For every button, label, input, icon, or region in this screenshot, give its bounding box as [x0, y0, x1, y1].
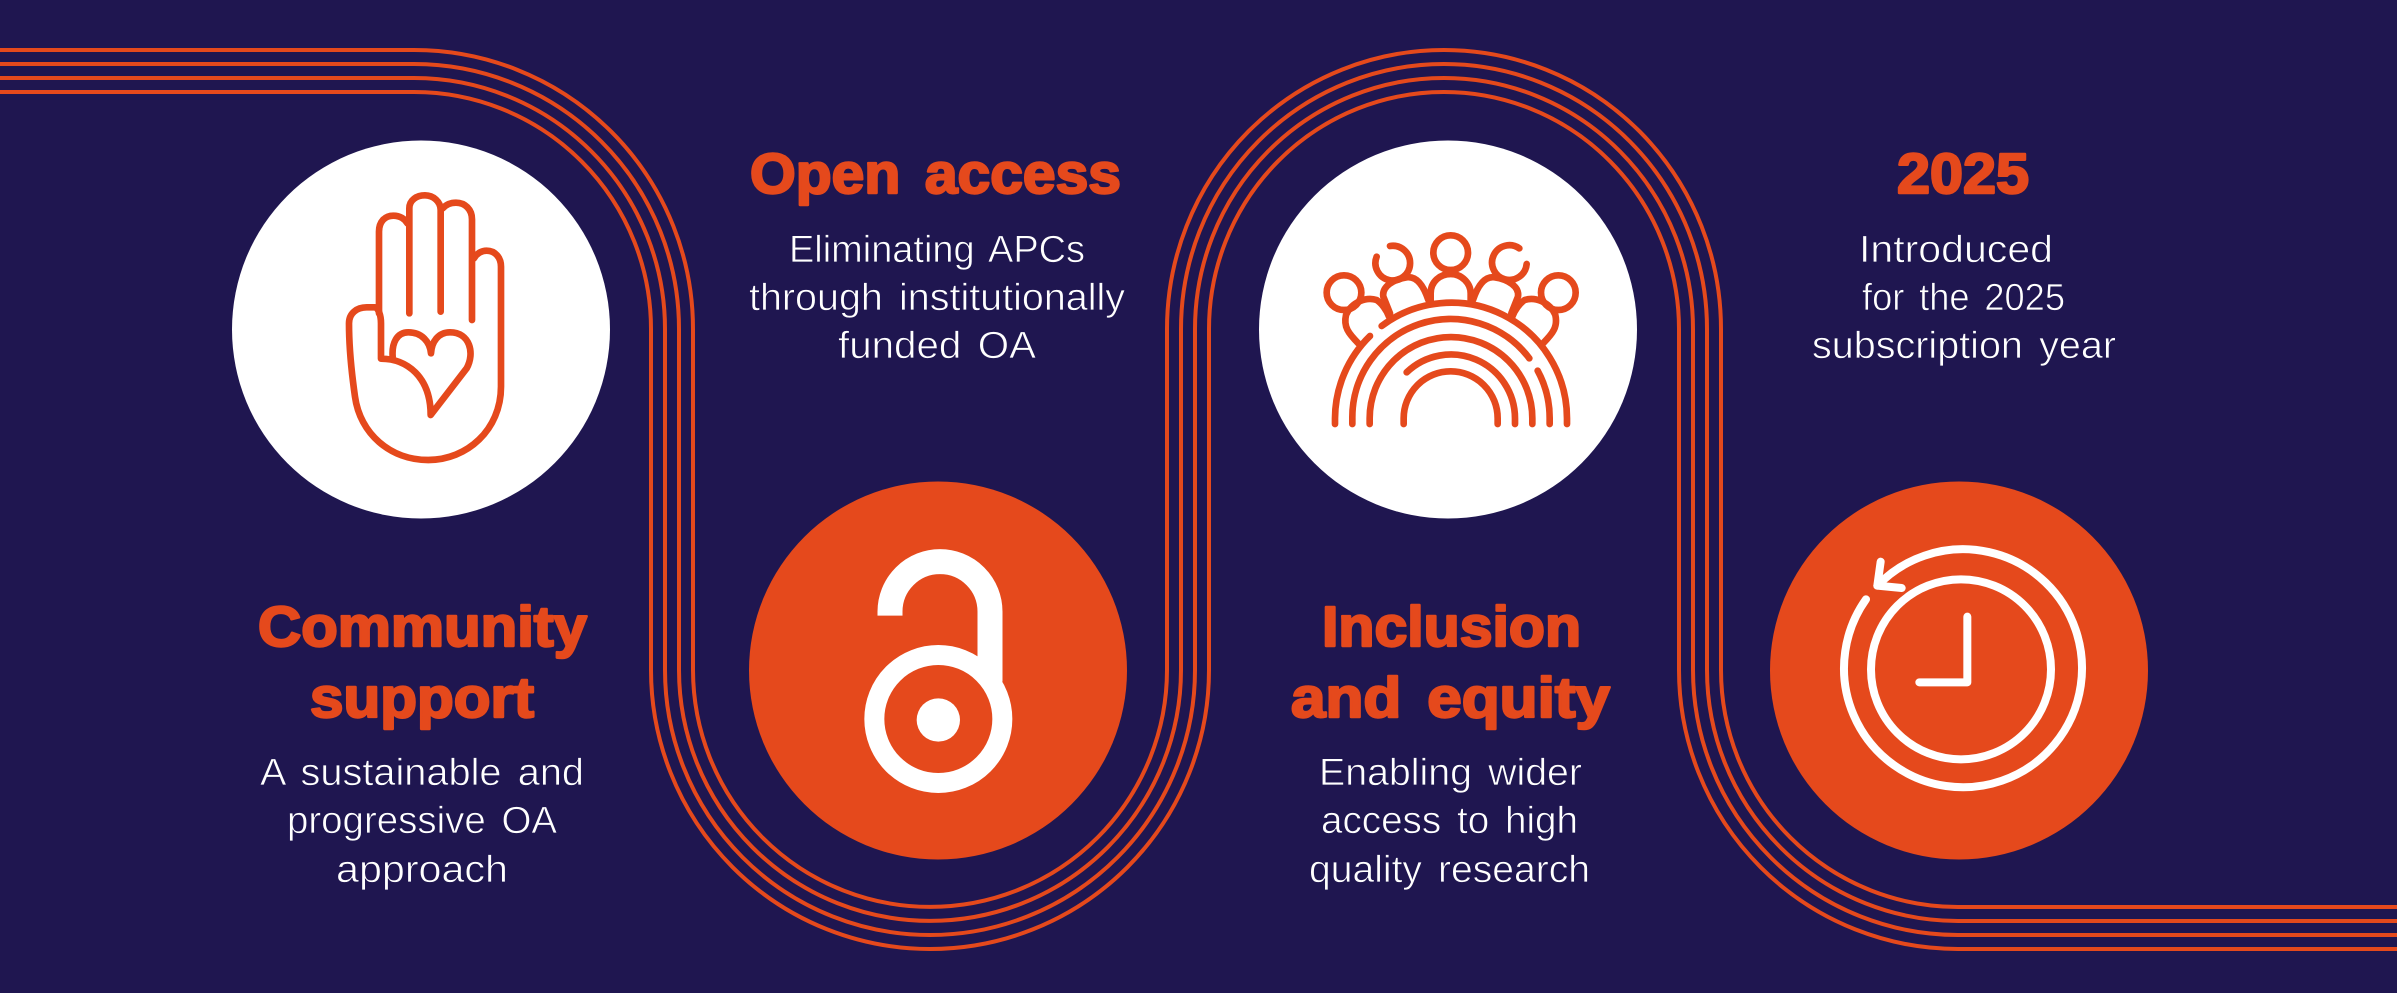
- panel: open access: [749, 142, 1127, 860]
- text: open access description: [749, 229, 1125, 367]
- heading: open access: Open access: [750, 142, 1121, 206]
- text: open access description: funded OA: [838, 325, 1037, 367]
- panel: community support: [232, 140, 610, 891]
- panel: inclusion and equity: [1259, 140, 1637, 891]
- heading: inclusion and equity: and equity: [1291, 666, 1610, 730]
- text: community support description: approach: [336, 849, 508, 891]
- heading: community support: [258, 595, 587, 730]
- text: 2025 description: for the 2025: [1862, 277, 2065, 319]
- panel: 2025: [1770, 142, 2148, 860]
- text: inclusion description: quality research: [1309, 849, 1590, 891]
- heading: inclusion and equity: Inclusion: [1322, 595, 1581, 659]
- text: community support description: A sustainable and: [260, 752, 584, 794]
- text: inclusion description: [1309, 752, 1590, 891]
- text: 2025 description: [1812, 229, 2116, 367]
- text: open access description: Eliminating APCs: [789, 229, 1085, 271]
- icon: open access padlock: [749, 482, 1127, 860]
- heading: inclusion and equity: [1291, 595, 1610, 730]
- icon: people around a rainbow: [1259, 140, 1637, 518]
- text: inclusion description: access to high: [1321, 800, 1578, 842]
- text: 2025 description: Introduced: [1859, 229, 2053, 271]
- text: open access description: through institutionally: [749, 277, 1125, 319]
- text: community support description: progressive OA: [287, 800, 558, 842]
- text: inclusion description: Enabling wider: [1319, 752, 1582, 794]
- heading: 2025: 2025: [1897, 142, 2029, 206]
- icon: clock with counter-clockwise arrow: [1770, 482, 2148, 860]
- text: community support description: [260, 752, 584, 891]
- heading: community support: support: [310, 666, 534, 730]
- text: 2025 description: subscription year: [1812, 325, 2116, 367]
- heading: community support: Community: [258, 595, 587, 659]
- icon: hand with heart: [232, 140, 610, 518]
